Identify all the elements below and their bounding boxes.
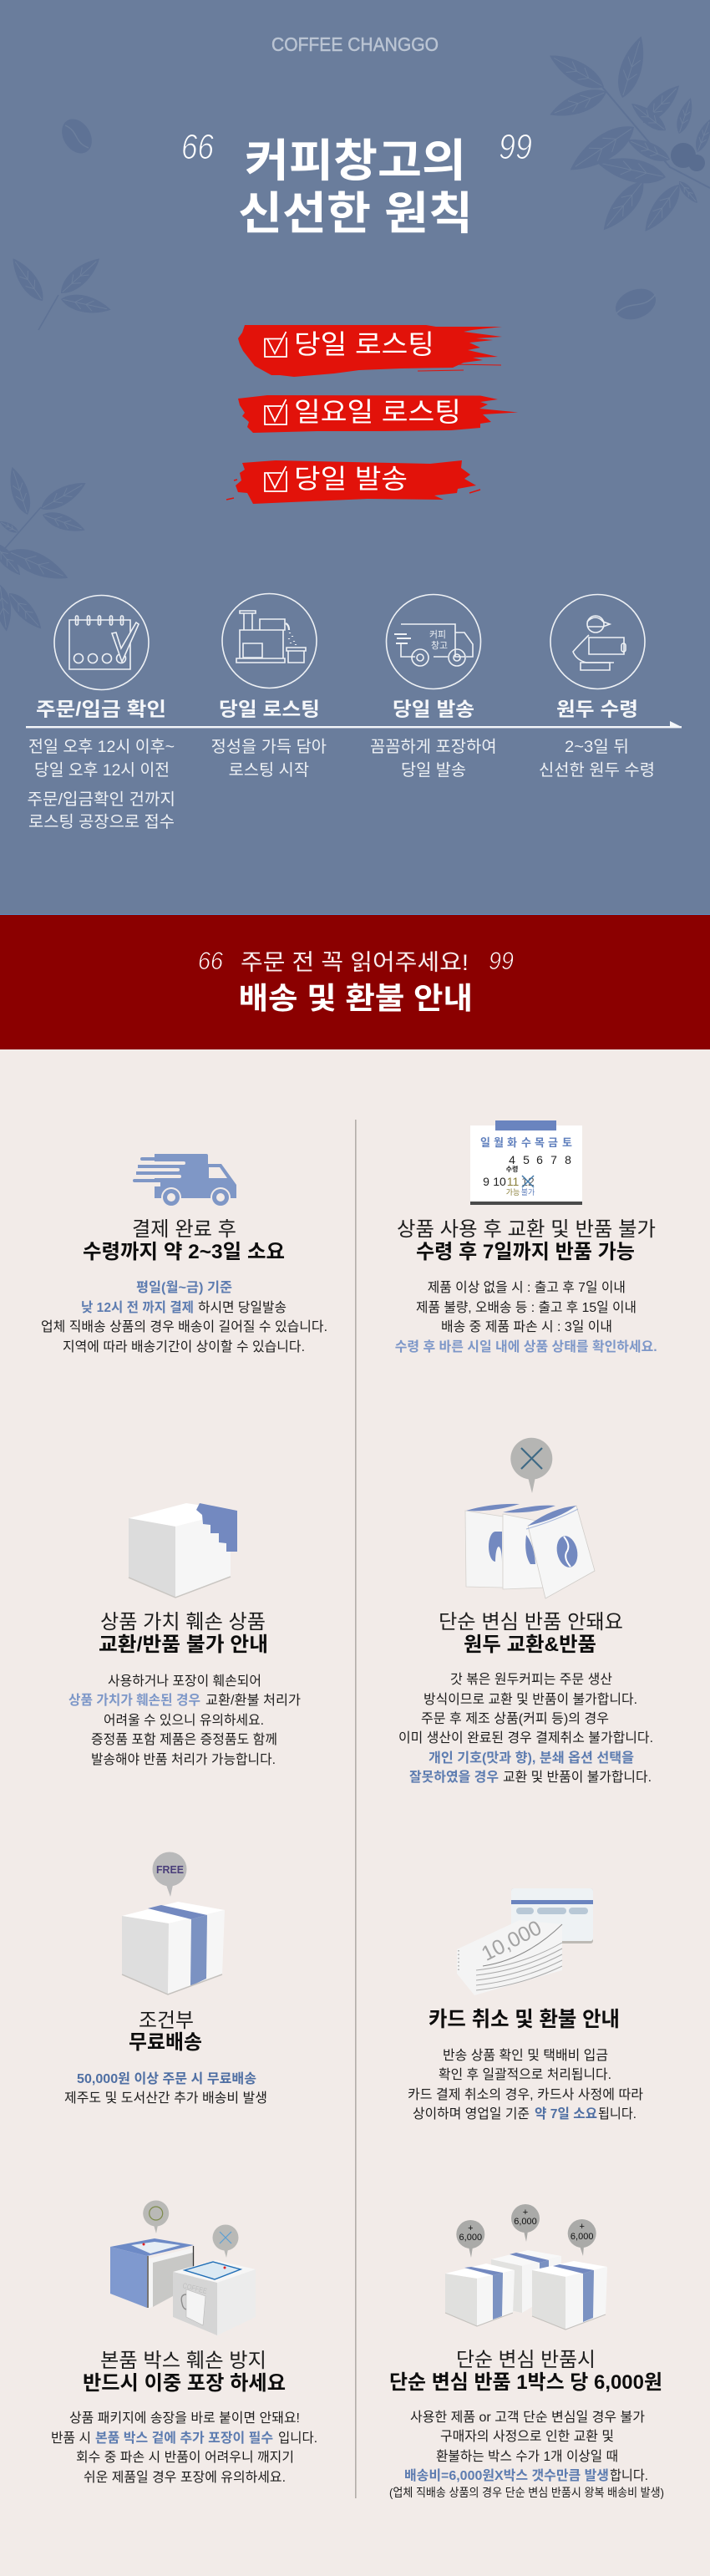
icon: fee pin centre: 6,000	[514, 2217, 537, 2227]
icon: order calendar	[54, 595, 149, 690]
cell heading	[129, 2009, 202, 2054]
icon: delivery truck	[386, 595, 481, 688]
icon: free pin	[152, 1852, 187, 1897]
cell heading: 조건부	[139, 2009, 194, 2032]
cell body: 반송 상품 확인 및 택배비 입금	[443, 2048, 608, 2063]
icon: fee pin left	[456, 2220, 484, 2258]
cell heading: 반드시 이중 포장 하세요	[83, 2372, 286, 2395]
icon: calendar: 7	[550, 1153, 557, 1166]
icon: fee pin right: 6,000	[571, 2232, 593, 2242]
cell heading	[389, 2349, 662, 2394]
icon: calendar: 10	[493, 1175, 506, 1188]
icon: fee pin left: 6,000	[459, 2233, 482, 2243]
cell body: 개인 기호(맛과 향), 분쇄 옵션 선택을	[429, 1750, 634, 1766]
cell body: 상품 패키지에 송장을 바로 붙이면 안돼요!	[69, 2411, 300, 2426]
cell body: 카드 결제 취소의 경우, 카드사 사정에 따라	[408, 2087, 643, 2102]
panel: free shipping	[64, 1852, 267, 2106]
cell heading: 단순 변심 반품 1박스 당 6,000원	[389, 2371, 662, 2394]
panel: delivery time	[41, 1154, 327, 1354]
cell body	[68, 1674, 301, 1767]
icon: calendar: 4	[509, 1153, 515, 1166]
icon: rejection pin	[510, 1438, 552, 1493]
cell body: 업체 직배송 상품의 경우 배송이 길어질 수 있습니다.	[41, 1319, 327, 1334]
cell heading: 상품 사용 후 교환 및 반품 불가	[397, 1218, 656, 1241]
cell body: (업체 직배송 상품의 경우 단순 변심 반품시 왕복 배송비 발생)	[389, 2486, 664, 2499]
cell body: 입니다.	[278, 2431, 317, 2446]
cell body	[41, 1280, 327, 1354]
cell body: 본품 박스 겉에 추가 포장이 필수	[95, 2431, 273, 2446]
icon: calendar: 수령	[506, 1165, 518, 1173]
step headings	[36, 699, 638, 720]
icon: calendar: 월	[494, 1136, 504, 1149]
cell body: 발송해야 반품 처리가 가능합니다.	[91, 1752, 276, 1767]
cell body: 상품 가치가 훼손된 경우	[68, 1693, 200, 1708]
quote mark left: 66	[198, 948, 223, 975]
step descriptions: 당일 오후 12시 이전	[34, 761, 170, 780]
icon: delivery truck: 커피	[429, 629, 446, 640]
band subtitle: 주문 전 꼭 읽어주세요!	[241, 950, 469, 975]
band heading: 배송 및 환불 안내	[239, 981, 473, 1015]
cell body: 낮 12시 전 까지 결제	[81, 1300, 194, 1315]
icon: coffee bags	[465, 1504, 595, 1598]
cell heading: 단순 변심 반품 안돼요	[439, 1611, 623, 1633]
cell heading	[397, 1218, 656, 1263]
icon: coffee bean right	[611, 283, 661, 325]
cell body: 주문 후 제조 상품(커피 등)의 경우	[421, 1711, 609, 1726]
cell body: 50,000원 이상 주문 시 무료배송	[77, 2071, 256, 2086]
icon: fee pin centre	[511, 2204, 540, 2242]
icon: coffee bean left	[56, 114, 98, 159]
icon: calendar: 불가	[521, 1188, 535, 1197]
cell body: 교환/환불 처리가	[205, 1693, 301, 1708]
callout: same-day roasting brush: 당일 로스팅	[294, 329, 434, 359]
panel: return fee	[389, 2204, 664, 2499]
quote mark left: 66	[181, 127, 214, 167]
cell body: 회수 중 파손 시 반품이 어려우니 깨지기	[76, 2450, 294, 2465]
icon: calendar: 8	[565, 1153, 571, 1166]
icon: calendar: 목	[535, 1136, 545, 1149]
icon: calendar: 9	[483, 1175, 489, 1188]
cell body: 약 7일 소요	[535, 2106, 597, 2121]
cell body: 갓 볶은 원두커피는 주문 생산	[450, 1672, 612, 1687]
cell body	[389, 2410, 664, 2499]
cell heading	[83, 2350, 286, 2395]
panel: card refund	[408, 1888, 643, 2121]
cell body: 배송 중 제품 파손 시 : 3일 이내	[441, 1319, 612, 1334]
panel: damaged goods	[68, 1503, 301, 1767]
icon: fee pin right: +	[579, 2222, 585, 2232]
panel: cream information background	[0, 1049, 710, 2576]
step descriptions: 신선한 원두 수령	[539, 761, 655, 780]
icon: calendar: 화	[507, 1136, 517, 1149]
cell body: 제품 이상 없을 시 : 출고 후 7일 이내	[428, 1280, 626, 1295]
icon: unboxed package: COFFEE	[182, 2281, 208, 2295]
icon: delivery truck: 창고	[431, 640, 448, 651]
panel: return period	[395, 1120, 657, 1354]
icon: calendar: 토	[562, 1136, 572, 1149]
cell body: 합니다.	[610, 2468, 648, 2483]
step descriptions: 정성을 가득 담아	[211, 738, 327, 756]
cell body: 상이하며 영업일 기준	[413, 2106, 530, 2121]
icon: no pin	[212, 2224, 239, 2258]
icon: calendar: 6	[536, 1153, 543, 1166]
step descriptions: 주문/입금확인 건까지	[27, 790, 175, 809]
quote mark right: 99	[499, 127, 532, 167]
cell body: 제품 불량, 오배송 등 : 출고 후 15일 이내	[416, 1300, 636, 1315]
cell heading	[99, 1611, 268, 1656]
icon: calendar: 11	[507, 1175, 519, 1188]
icon: card and banknotes	[457, 1888, 593, 1995]
cell heading	[83, 1218, 285, 1263]
column divider	[355, 1120, 357, 2498]
step headings: 원두 수령	[556, 699, 638, 720]
cell heading: 단순 변심 반품시	[456, 2349, 596, 2371]
cell heading: 원두 교환&반품	[464, 1633, 596, 1656]
step descriptions: 전일 오후 12시 이후~	[28, 738, 175, 756]
decoration: bottom left coffee branch	[0, 465, 90, 633]
icon: calendar: 금	[548, 1136, 558, 1149]
cell heading: 무료배송	[129, 2031, 202, 2054]
icon: damaged box	[129, 1503, 237, 1598]
cell heading	[439, 1611, 623, 1656]
panel: beans exchange	[398, 1438, 653, 1785]
cell body: 배송비=6,000원X박스 갯수만큼 발생	[404, 2468, 609, 2483]
cell body: 방식이므로 교환 및 반품이 불가합니다.	[423, 1692, 637, 1707]
cell body: 지역에 따라 배송기간이 상이할 수 있습니다.	[63, 1339, 305, 1354]
brand name: COFFEE CHANGGO	[271, 33, 439, 55]
callout: same-day roasting brush	[238, 325, 502, 377]
panel: red notice band	[0, 914, 710, 1049]
icon: fast truck	[133, 1154, 236, 1207]
cell body	[64, 2071, 267, 2106]
title: 신선한 원칙	[238, 189, 473, 239]
quote mark right: 99	[489, 948, 514, 975]
decoration: top right coffee branch	[545, 33, 710, 237]
cell body	[395, 1280, 657, 1354]
cell heading: 카드 취소 및 환불 안내	[429, 2008, 620, 2031]
cell heading: 상품 가치 훼손 상품	[100, 1611, 266, 1633]
panel: blue header background	[0, 0, 710, 915]
step headings: 주문/입금 확인	[36, 699, 166, 720]
icon: fee pin left: +	[468, 2223, 474, 2233]
step descriptions: 당일 발송	[401, 761, 466, 780]
icon: calendar: 일	[480, 1136, 490, 1149]
cell body	[408, 2048, 643, 2121]
cell body: 환불하는 박스 수가 1개 이상일 때	[436, 2449, 618, 2464]
cell body: 반품 시	[51, 2431, 91, 2446]
callout: Sunday roasting brush	[238, 395, 518, 433]
icon: unboxed package	[173, 2260, 256, 2335]
cell body: 교환 및 반품이 불가합니다.	[503, 1770, 652, 1785]
icon: fee pin centre: +	[523, 2208, 528, 2218]
cell heading: 수령까지 약 2~3일 소요	[83, 1241, 285, 1263]
cell heading: 교환/반품 불가 안내	[99, 1633, 268, 1656]
arrow: process timeline	[26, 721, 682, 728]
cell body: 확인 후 일괄적으로 처리됩니다.	[439, 2067, 611, 2082]
cell heading: 수령 후 7일까지 반품 가능	[416, 1241, 635, 1263]
cell body: 됩니다.	[598, 2106, 636, 2121]
cell body: 사용하거나 포장이 훼손되어	[108, 1674, 261, 1689]
icon: taped box	[122, 1902, 225, 1994]
step descriptions: 2~3일 뒤	[565, 738, 629, 756]
cell body: 수령 후 바른 시일 내에 상품 상태를 확인하세요.	[395, 1339, 657, 1354]
callout: Sunday roasting brush: 일요일 로스팅	[294, 397, 461, 427]
cell body: 제주도 및 도서산간 추가 배송비 발생	[64, 2091, 267, 2106]
callout: same-day shipping brush: 당일 발송	[294, 464, 408, 494]
step descriptions	[27, 738, 655, 831]
cell body: 쉬운 제품일 경우 포장에 유의하세요.	[84, 2470, 286, 2485]
cell body: 어려울 수 있으니 유의하세요.	[104, 1713, 264, 1728]
icon: card and banknotes: 10,000	[478, 1916, 545, 1966]
cell body: 사용한 제품 or 고객 단순 변심일 경우 불가	[410, 2410, 645, 2425]
icon: calendar	[470, 1120, 582, 1205]
cell body	[398, 1672, 653, 1785]
cell body: 잘못하였을 경우	[409, 1770, 499, 1785]
title	[238, 136, 473, 239]
cell body: 증정품 포함 제품은 증정품도 함께	[91, 1732, 277, 1747]
icon: calendar: 가능	[506, 1188, 520, 1197]
icon: three boxes	[445, 2250, 607, 2330]
callout: same-day shipping brush	[226, 460, 480, 504]
cell heading: 결제 완료 후	[132, 1218, 236, 1241]
icon: ok pin	[143, 2201, 169, 2233]
icon: boxed package	[110, 2238, 194, 2309]
panel: double packaging	[51, 2201, 317, 2485]
icon: roaster	[222, 593, 317, 688]
step descriptions: 꼼꼼하게 포장하여	[370, 738, 497, 756]
icon: free pin: FREE	[156, 1863, 184, 1876]
icon: courier receiving beans	[550, 595, 645, 688]
icon: fee pin right	[568, 2219, 596, 2256]
cell body: 이미 생산이 완료된 경우 결제취소 불가합니다.	[398, 1730, 653, 1745]
icon: calendar: 12	[521, 1175, 535, 1188]
title: 커피창고의	[245, 136, 466, 186]
decoration: left coffee sprig	[6, 252, 113, 330]
step headings: 당일 로스팅	[219, 699, 320, 720]
icon: calendar: 5	[523, 1153, 530, 1166]
step descriptions: 로스팅 시작	[229, 761, 309, 780]
cell body: 구매자의 사정으로 인한 교환 및	[440, 2429, 614, 2444]
cell heading: 본품 박스 훼손 방지	[100, 2350, 266, 2372]
step descriptions: 로스팅 공장으로 접수	[28, 813, 175, 831]
icon: calendar: 수	[521, 1136, 531, 1149]
cell body: 평일(월~금) 기준	[136, 1280, 232, 1295]
step headings: 당일 발송	[393, 699, 474, 720]
cell body: 하시면 당일발송	[198, 1300, 287, 1315]
cell body	[51, 2411, 317, 2485]
